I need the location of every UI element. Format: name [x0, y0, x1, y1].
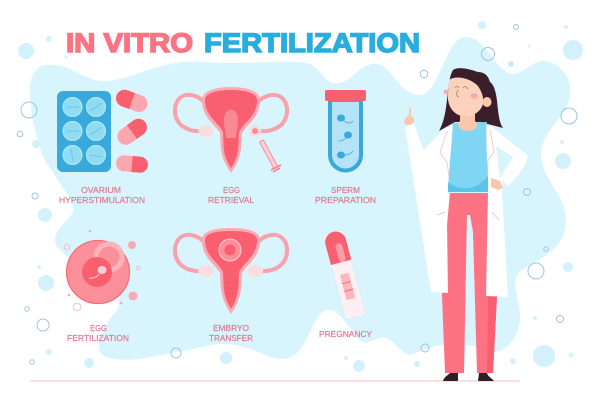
label: ovarium hyperstimulation: OVARIUM — [81, 185, 121, 195]
icon: uterus with egg retrieval — [175, 87, 287, 173]
label: pregnancy: PREGNANCY — [319, 329, 372, 339]
label: sperm preparation: SPERM — [331, 185, 360, 195]
face — [448, 78, 483, 116]
label: sperm preparation — [315, 185, 376, 205]
label: ovarium hyperstimulation: HYPERSTIMULATION — [59, 195, 145, 205]
icon: pregnancy test — [323, 229, 366, 320]
hair — [439, 68, 503, 131]
ear — [482, 97, 492, 107]
neck — [458, 112, 477, 131]
label: egg retrieval: RETRIEVAL — [208, 195, 254, 205]
character: doctor — [404, 68, 527, 381]
label: egg retrieval: EGG — [223, 185, 240, 195]
lab coat — [405, 122, 527, 297]
icon: blister pack — [57, 91, 111, 172]
shirt — [448, 122, 488, 192]
background blob — [30, 37, 570, 360]
icon: capsule one — [114, 87, 150, 114]
icon: uterus with embryo transfer — [175, 228, 287, 314]
icon: capsule two — [114, 115, 150, 148]
facial features — [455, 86, 468, 97]
icon: egg fertilization — [64, 230, 140, 311]
title: FERTILIZATION — [204, 28, 420, 58]
cheeks — [444, 90, 478, 99]
title: IN VITRO — [66, 28, 193, 58]
icon: capsule three — [115, 155, 149, 173]
title — [66, 28, 420, 58]
shoes — [443, 373, 494, 381]
ground line — [30, 380, 520, 382]
label: embryo transfer: EMBRYO — [213, 323, 249, 333]
pants — [442, 193, 497, 373]
label: embryo transfer — [209, 323, 253, 343]
label: egg fertilization — [67, 323, 129, 343]
hand raised — [404, 107, 414, 125]
label: embryo transfer: TRANSFER — [209, 333, 253, 343]
icon: sperm test tube — [325, 90, 366, 170]
label: egg fertilization: EGG — [90, 323, 107, 333]
label: egg fertilization: FERTILIZATION — [67, 333, 129, 343]
gap between arm and coat — [496, 146, 513, 178]
hand on hip — [491, 178, 503, 190]
label: sperm preparation: PREPARATION — [315, 195, 376, 205]
label: ovarium hyperstimulation — [59, 185, 145, 205]
label: egg retrieval — [208, 185, 254, 205]
